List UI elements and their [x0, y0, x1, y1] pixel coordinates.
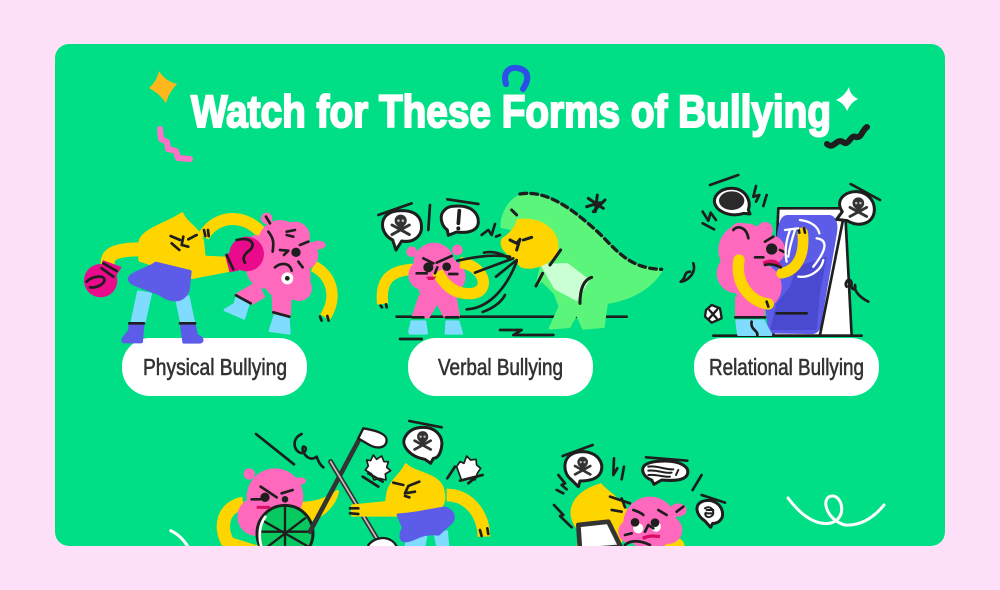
illustration: relational bullying — [681, 175, 880, 336]
illustration: bottom-left cyberbullying scene — [171, 421, 488, 562]
label: relational bullying — [694, 338, 879, 396]
label: verbal bullying: Verbal Bullying — [438, 354, 563, 380]
illustration: physical bullying — [84, 213, 332, 342]
label: relational bullying: Relational Bullying — [709, 354, 864, 380]
decoration: title accents — [149, 68, 884, 525]
panel: green card — [55, 44, 945, 546]
label: verbal bullying — [408, 338, 593, 396]
title: Watch for These Forms of Bullying — [191, 86, 831, 137]
illustration: bottom-right cyberbullying scene — [554, 445, 725, 550]
illustration: verbal bullying — [378, 193, 662, 339]
label: physical bullying — [122, 338, 307, 396]
label: physical bullying: Physical Bullying — [143, 354, 287, 380]
